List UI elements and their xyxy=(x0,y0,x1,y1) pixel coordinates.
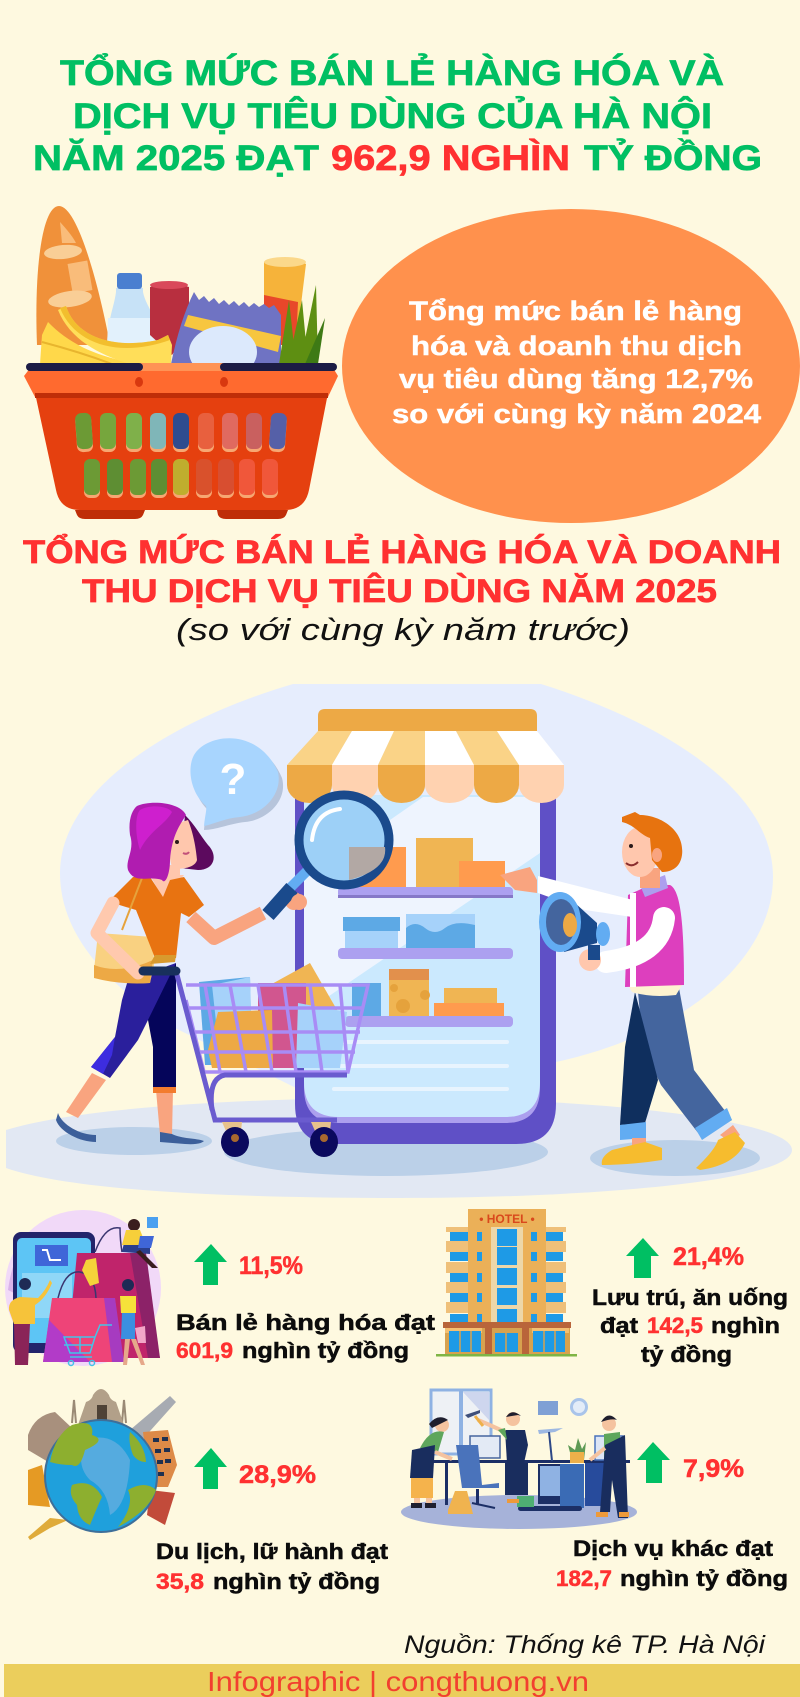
label: tỷ đồng xyxy=(641,1342,732,1367)
label: 142,5 xyxy=(647,1313,703,1338)
label xyxy=(592,1285,788,1367)
footer band: Infographic | congthuong.vn xyxy=(207,1666,589,1697)
panel: other services xyxy=(401,1390,788,1591)
icon: globe and landmarks xyxy=(28,1389,177,1540)
awning xyxy=(287,709,564,803)
panel: tourism xyxy=(28,1389,389,1594)
callout: orange ellipse: so với cùng kỳ năm 2024 xyxy=(392,399,761,429)
label: 601,9 xyxy=(176,1338,233,1363)
icon: question bubble xyxy=(190,738,283,830)
title: DỊCH VỤ TIÊU DÙNG CỦA HÀ NỘI xyxy=(73,96,712,136)
section heading: (so với cùng kỳ năm trước) xyxy=(176,612,630,647)
label: Dịch vụ khác đạt xyxy=(573,1536,774,1561)
label: nghìn tỷ đồng xyxy=(242,1338,409,1363)
section heading: THU DỊCH VỤ TIÊU DÙNG NĂM 2025 xyxy=(82,573,717,609)
label: nghìn xyxy=(711,1313,780,1338)
label: Du lịch, lữ hành đạt xyxy=(156,1539,389,1564)
label: đạt xyxy=(600,1313,639,1338)
title: TỶ ĐỒNG xyxy=(584,138,762,178)
source note: Nguồn: Thống kê TP. Hà Nội xyxy=(404,1631,767,1659)
illustration: shoppers at phone storefront xyxy=(6,684,792,1198)
arrow: up xyxy=(637,1442,670,1483)
title xyxy=(33,53,762,178)
icon: magnifying glass xyxy=(268,795,389,915)
arrow: up xyxy=(194,1448,227,1489)
arrow: up xyxy=(194,1244,227,1285)
callout: orange ellipse: Tổng mức bán lẻ hàng xyxy=(409,296,742,326)
percentage: 11,5% xyxy=(239,1252,303,1280)
icon: hotel: • HOTEL • xyxy=(479,1212,535,1226)
man with megaphone xyxy=(500,812,745,1170)
label: nghìn tỷ đồng xyxy=(213,1569,380,1594)
icon: cleaning staff in office xyxy=(401,1390,637,1529)
icon: shopping bags xyxy=(5,1210,161,1366)
label: 182,7 xyxy=(556,1566,612,1591)
label xyxy=(176,1310,436,1363)
label xyxy=(556,1536,788,1591)
panel: retail xyxy=(5,1210,436,1366)
title: 962,9 NGHÌN xyxy=(331,138,570,178)
woman shopper xyxy=(56,803,303,1144)
footer band xyxy=(4,1664,800,1697)
callout: orange ellipse xyxy=(342,209,800,523)
panel: accommodation xyxy=(436,1209,788,1367)
percentage: 28,9% xyxy=(239,1461,316,1489)
label: Bán lẻ hàng hóa đạt xyxy=(176,1310,436,1335)
phone storefront xyxy=(295,795,556,1144)
section heading: TỔNG MỨC BÁN LẺ HÀNG HÓA VÀ DOANH xyxy=(23,534,781,570)
label: nghìn tỷ đồng xyxy=(620,1566,788,1591)
label xyxy=(156,1539,389,1594)
section heading xyxy=(23,534,781,647)
callout: orange ellipse: vụ tiêu dùng tăng 12,7% xyxy=(399,364,753,394)
icon: question bubble: ? xyxy=(220,755,246,804)
callout: orange ellipse: hóa và doanh thu dịch xyxy=(411,331,742,361)
label: 35,8 xyxy=(156,1569,204,1594)
label: Lưu trú, ăn uống xyxy=(592,1285,788,1310)
title: NĂM 2025 ĐẠT xyxy=(33,139,319,178)
icon: shopping basket with groceries xyxy=(24,206,338,519)
percentage: 21,4% xyxy=(673,1243,744,1271)
title: TỔNG MỨC BÁN LẺ HÀNG HÓA VÀ xyxy=(60,53,724,93)
icon: hotel xyxy=(436,1209,577,1356)
percentage: 7,9% xyxy=(683,1455,744,1483)
arrow: up xyxy=(626,1238,659,1278)
shopping cart xyxy=(143,963,368,1157)
